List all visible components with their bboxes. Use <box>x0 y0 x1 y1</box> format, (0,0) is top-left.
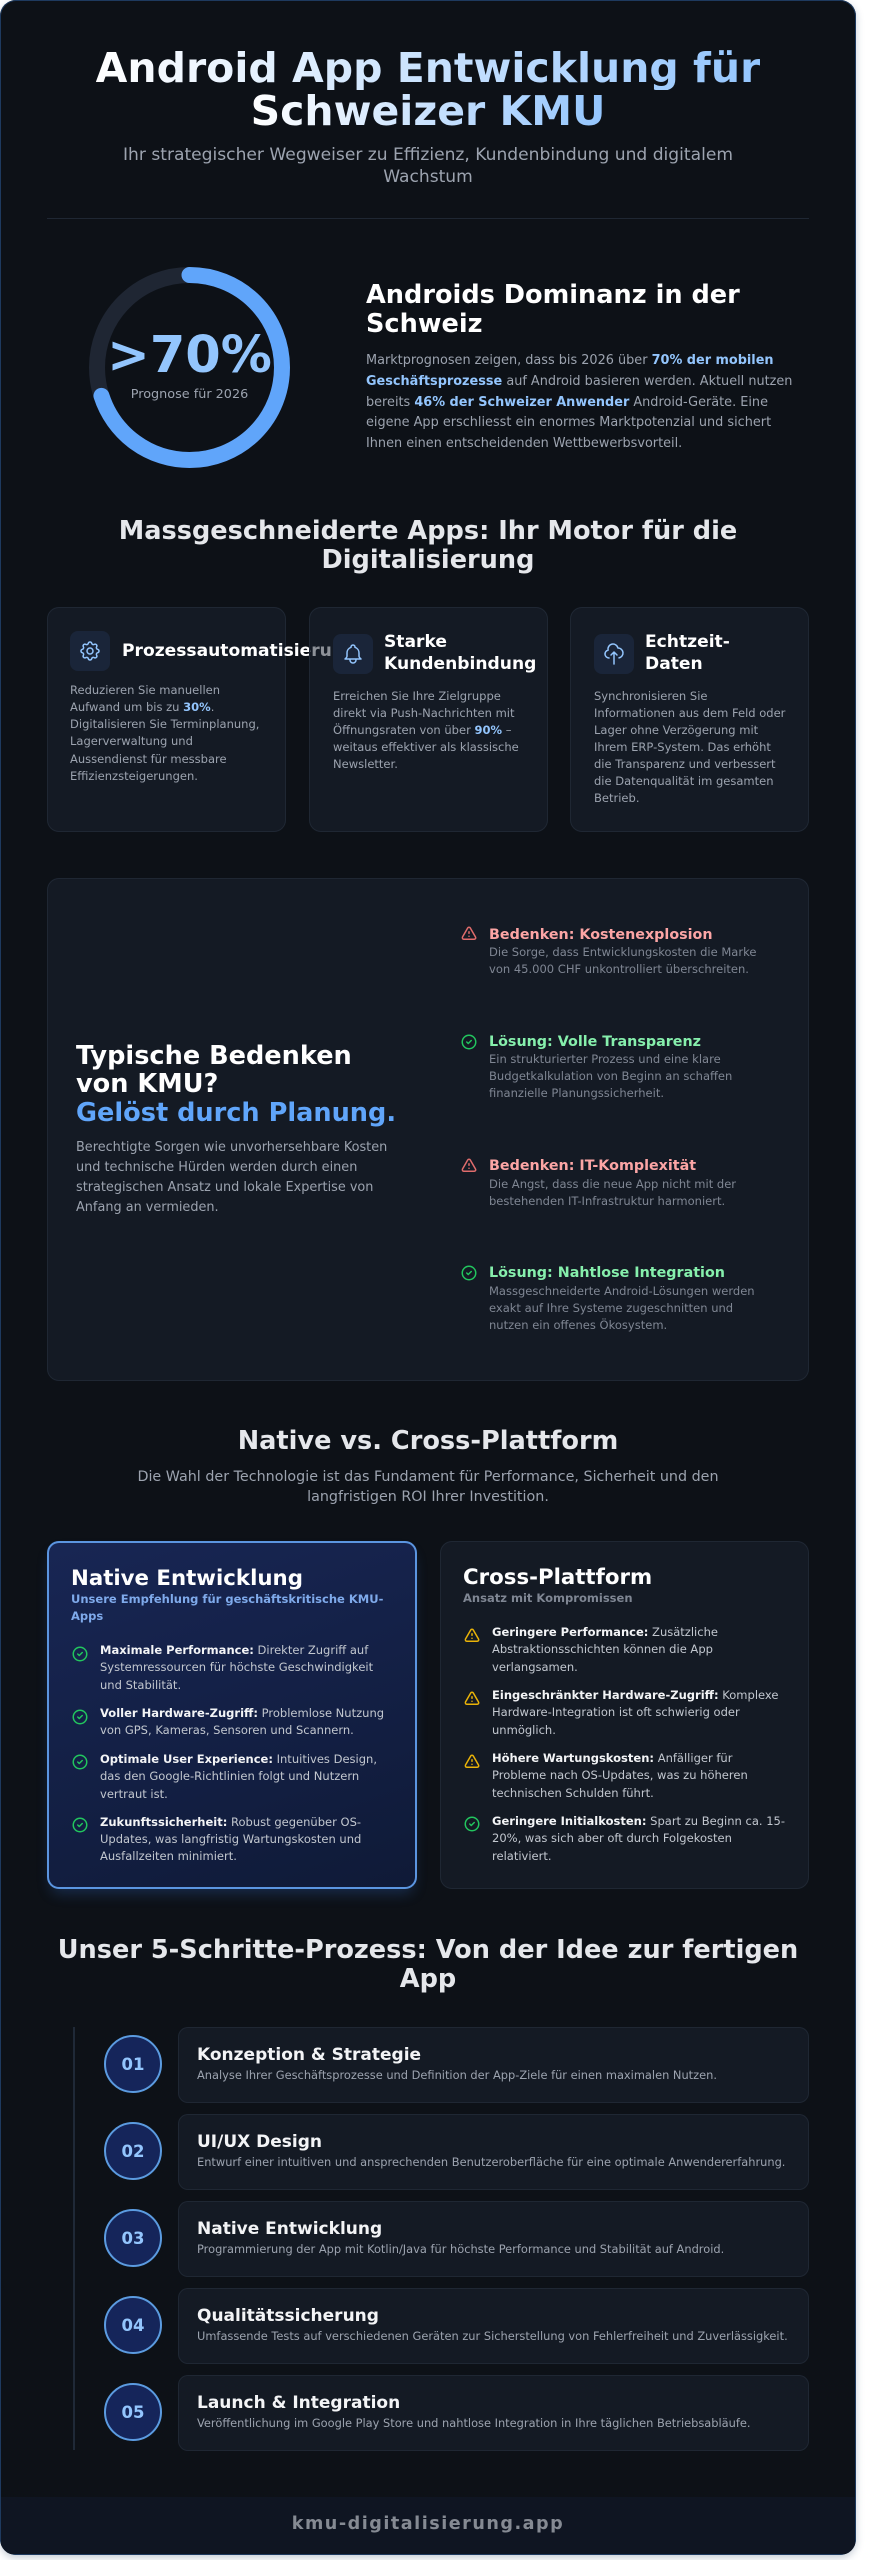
panel: Native Entwicklung <box>47 1541 417 1889</box>
solution text: Budgetkalkulation von Beginn an schaffen <box>489 1069 732 1083</box>
heading: Typische Bedenken <box>76 1040 396 1128</box>
item: Abstraktionsschichten können die App <box>492 1642 713 1656</box>
card text: Lagerverwaltung und <box>70 734 193 748</box>
solution text: Massgeschneiderte Android-Lösungen werden <box>489 1284 755 1298</box>
card text <box>333 688 519 771</box>
card text <box>70 683 259 783</box>
concern text <box>489 1176 736 1208</box>
card text: Digitalisieren Sie Terminplanung, <box>70 717 259 731</box>
step number 05 <box>104 2383 162 2441</box>
heading: Typische Bedenken: Typische Bedenken <box>76 1040 352 1070</box>
step number 01 <box>104 2035 162 2093</box>
item <box>492 1814 785 1863</box>
step title: Launch & Integration <box>197 2393 400 2413</box>
card title <box>384 632 536 674</box>
card title: Starke <box>384 632 447 652</box>
item: Maximale Performance: Direkter Zugriff auf <box>100 1643 368 1657</box>
icon: check <box>72 1818 88 1832</box>
heading: Massgeschneiderte Apps <box>119 516 737 574</box>
item: Hardware-Integration ist oft schwierig oder <box>492 1705 740 1719</box>
step number 03 <box>104 2209 162 2267</box>
heading: Androids Dominanz <box>366 280 740 338</box>
step number 03: 03 <box>122 2228 144 2248</box>
item <box>492 1688 778 1737</box>
text: Berechtigte Sorgen <box>76 1140 387 1215</box>
step title: Native Entwicklung <box>197 2219 382 2239</box>
item: Systemressourcen für höchste Geschwindigkeit <box>100 1660 373 1674</box>
text: Berechtigte Sorgen: Anfang an vermieden. <box>76 1200 219 1215</box>
step text: Analyse Ihrer Geschäftsprozesse und Definition der App-Ziele für einen maximalen Nutzen. <box>197 2068 717 2082</box>
solution title: Lösung: Volle Transparenz <box>489 1034 701 1050</box>
step card 1 <box>178 2027 809 2103</box>
card text: Aussendienst für messbare <box>70 752 227 766</box>
paragraph: market forecast: bereits 46% der Schweizer Anwender Android-Geräte. Eine <box>366 395 768 410</box>
item <box>100 1643 373 1692</box>
concern text <box>489 945 756 976</box>
heading: 5-Schritte-Prozess: Unser 5-Schritte-Prozess: Von der Idee zur fertigen <box>58 1935 798 1965</box>
icon: warning <box>462 1158 476 1172</box>
item <box>100 1814 361 1863</box>
item: technischen Schulden führt. <box>492 1786 654 1800</box>
card text: die Transparenz und verbessert <box>594 757 776 771</box>
subtitle <box>123 145 733 187</box>
title: Native Entwicklung <box>71 1566 303 1591</box>
card title: Kundenbindung <box>384 654 536 674</box>
title: Schweizer KMU <box>251 87 605 135</box>
icon: warning <box>464 1628 480 1642</box>
card title: Prozessautomatisierung <box>122 641 356 661</box>
item <box>492 1751 748 1800</box>
item: Probleme nach OS-Updates, was zu höheren <box>492 1768 748 1782</box>
step text: Umfassende Tests auf verschiedenen Geräten zur Sicherstellung von Fehlerfreiheit und Zuverlässigkeit. <box>197 2328 788 2342</box>
heading: Androids Dominanz: Schweiz <box>366 308 482 338</box>
heading: 5-Schritte-Prozess: App <box>400 1964 456 1994</box>
card: Starke Kundenbindung <box>309 607 548 832</box>
icon: check <box>72 1710 88 1724</box>
item: Updates, was langfristig Wartungskosten und <box>100 1832 361 1846</box>
card text: Betrieb. <box>594 791 640 805</box>
title: Cross-Plattform <box>463 1564 652 1590</box>
item: Geringere Initialkosten: Spart zu Beginn ca. 15- <box>492 1814 785 1828</box>
card title <box>645 632 730 674</box>
step card 3 <box>178 2201 809 2277</box>
step text: Entwurf einer intuitiven und ansprechenden Benutzeroberfläche für eine optimale Anwendererfahrung. <box>197 2154 785 2168</box>
step number 02: 02 <box>122 2142 144 2160</box>
heading: Androids Dominanz: Androids Dominanz in der <box>366 280 740 310</box>
step number 04 <box>104 2296 162 2354</box>
text: Berechtigte Sorgen: strategischen Ansatz und lokale Expertise von <box>76 1180 373 1195</box>
card text: Aufwand um bis zu 30%. <box>70 700 214 714</box>
solution text <box>489 1284 755 1332</box>
item <box>492 1625 718 1674</box>
item: das den Google-Richtlinien folgt und Nutzern <box>100 1769 359 1783</box>
subtitle: Unsere Empfehlung für geschäftskritische KMU- <box>71 1592 383 1606</box>
donut chart: 70 percent <box>89 267 290 468</box>
card: Echtzeit-Daten <box>570 607 809 832</box>
item: 20%, was sich aber oft durch Folgekosten <box>492 1831 732 1845</box>
card text: Effizienzsteigerungen. <box>70 769 198 783</box>
solution text: nutzen ein offenes Ökosystem. <box>489 1318 667 1332</box>
paragraph: market forecast: eigene App erschliesst ein enormes Marktpotenzial und sichert <box>366 415 771 430</box>
item: verlangsamen. <box>492 1660 578 1674</box>
title: Android App Entwicklung für <box>96 44 760 92</box>
heading: Typische Bedenken: Gelöst durch Planung. <box>76 1098 396 1128</box>
concern title: Bedenken: Kostenexplosion <box>489 926 713 942</box>
card text: Öffnungsraten von über 90% – <box>333 723 511 737</box>
heading: Massgeschneiderte Apps: Digitalisierung <box>322 544 534 574</box>
item: Voller Hardware-Zugriff: Problemlose Nutzung <box>100 1706 384 1720</box>
text: Berechtigte Sorgen: und technische Hürden werden durch einen <box>76 1160 357 1175</box>
item: Optimale User Experience: Intuitives Design, <box>100 1752 377 1766</box>
heading: Native vs. Cross-Plattform: Native vs. Cross-Plattform <box>238 1426 618 1456</box>
card text <box>594 688 786 805</box>
item: Eingeschränkter Hardware-Zugriff: Komplexe <box>492 1688 778 1702</box>
heading: Typische Bedenken: von KMU? <box>76 1069 218 1099</box>
concern text: Die Sorge, dass Entwicklungskosten die Marke <box>489 945 756 959</box>
item: von GPS, Kameras, Sensoren und Scannern. <box>100 1723 354 1737</box>
item: Ausfallzeiten minimiert. <box>100 1849 237 1863</box>
text: Berechtigte Sorgen: Berechtigte Sorgen wie unvorhersehbare Kosten <box>76 1140 387 1155</box>
icon: warning <box>464 1692 480 1705</box>
section intro text: Die Wahl der Technologie ist das Fundament für Performance, Sicherheit und den <box>137 1469 719 1485</box>
heading: 5-Schritte-Prozess <box>58 1935 798 1994</box>
card text: Ihrem ERP-System. Das erhöht <box>594 740 771 754</box>
concern text: Die Angst, dass die neue App nicht mit der <box>489 1176 736 1190</box>
card title: Daten <box>645 654 703 674</box>
step title: UI/UX Design <box>197 2132 322 2152</box>
paragraph: market forecast: Marktprognosen zeigen, dass bis 2026 über 70% der mobilen <box>366 353 774 368</box>
item: unmöglich. <box>492 1723 556 1737</box>
card title: Echtzeit- <box>645 632 730 652</box>
card text: Informationen aus dem Feld oder <box>594 706 785 720</box>
step card 4 <box>178 2288 809 2364</box>
item: vertraut ist. <box>100 1787 168 1801</box>
card text: Synchronisieren Sie <box>594 688 707 702</box>
item: Höhere Wartungskosten: Anfälliger für <box>492 1751 732 1765</box>
item: relativiert. <box>492 1849 552 1863</box>
heading: Massgeschneiderte Apps: Massgeschneiderte Apps: Ihr Motor für die <box>119 516 737 546</box>
card text: Lager ohne Verzögerung mit <box>594 723 758 737</box>
concern text: von 45.000 CHF unkontrolliert überschreiten. <box>489 962 749 976</box>
solution title: Lösung: Nahtlose Integration <box>489 1265 725 1281</box>
card text: Erreichen Sie Ihre Zielgruppe <box>333 688 501 702</box>
item: und Stabilität. <box>100 1678 181 1692</box>
footer <box>1 2497 855 2554</box>
card: Prozessautomatisierung <box>47 607 286 832</box>
icon: warning <box>462 926 476 940</box>
paragraph: market forecast <box>366 353 792 451</box>
concern text: bestehenden IT-Infrastruktur harmoniert. <box>489 1194 725 1208</box>
paragraph: market forecast: Ihnen einen entscheidenden Wettbewerbsvorteil. <box>366 436 682 451</box>
step text: Veröffentlichung im Google Play Store und nahtlose Integration in Ihre täglichen Betriebsabläufe. <box>197 2416 750 2430</box>
subtitle: Apps <box>71 1609 103 1623</box>
item <box>100 1706 384 1737</box>
solution text: Ein strukturierter Prozess und eine klare <box>489 1052 721 1066</box>
subtitle <box>71 1592 383 1623</box>
title <box>96 44 760 135</box>
paragraph: market forecast: Geschäftsprozesse auf Android basieren werden. Aktuell nutzen <box>366 374 792 389</box>
icon: check <box>462 1034 476 1050</box>
icon: warning <box>464 1754 480 1768</box>
step number 04: 04 <box>122 2316 144 2334</box>
concern title: Bedenken: IT-Komplexität <box>489 1158 696 1174</box>
card text: direkt via Push-Nachrichten mit <box>333 706 515 720</box>
step title: Qualitätssicherung <box>197 2306 379 2326</box>
subtitle: Ihr strategischer Wegweiser zu Effizienz, Kundenbindung und digitalem <box>123 145 733 165</box>
icon: gear <box>70 631 110 671</box>
subtitle: Wachstum <box>383 167 473 187</box>
step card 2 <box>178 2114 809 2190</box>
card text: Reduzieren Sie manuellen <box>70 683 220 697</box>
step text: Programmierung der App mit Kotlin/Java für höchste Performance und Stabilität auf Android. <box>197 2242 724 2256</box>
solution text <box>489 1052 732 1100</box>
subtitle: Ansatz mit Kompromissen <box>463 1591 633 1605</box>
step card 5 <box>178 2375 809 2451</box>
icon: check <box>462 1266 476 1280</box>
footer: kmu-digitalisierung.app <box>292 2514 564 2534</box>
item: Geringere Performance: Zusätzliche <box>492 1625 718 1639</box>
section intro text <box>137 1469 719 1505</box>
icon: cloud upload <box>594 634 634 674</box>
icon: check <box>72 1754 88 1770</box>
item: Zukunftssicherheit: Robust gegenüber OS- <box>100 1814 361 1828</box>
solution text: finanzielle Planungssicherheit. <box>489 1086 664 1100</box>
step number 05: 05 <box>122 2402 144 2422</box>
solution text: exakt auf Ihre Systeme zugeschnitten und <box>489 1301 733 1315</box>
step title: Konzeption & Strategie <box>197 2045 421 2065</box>
icon: check <box>72 1646 88 1662</box>
step number 01: 01 <box>122 2054 144 2074</box>
section intro text: langfristigen ROI Ihrer Investition. <box>307 1489 549 1505</box>
donut chart: 70 percent: Prognose für 2026 <box>131 387 248 402</box>
card text: die Datenqualität im gesamten <box>594 774 774 788</box>
donut chart: 70 percent: >70% <box>107 326 272 385</box>
panel: Cross-Plattform <box>440 1541 809 1889</box>
card text: Newsletter. <box>333 757 398 771</box>
panel: Bedenken und Lösungen <box>47 878 809 1381</box>
icon: check <box>464 1816 480 1832</box>
item <box>100 1752 377 1801</box>
step number 02 <box>104 2122 162 2180</box>
card text: weitaus effektiver als klassische <box>333 740 519 754</box>
icon: bell <box>333 634 373 674</box>
